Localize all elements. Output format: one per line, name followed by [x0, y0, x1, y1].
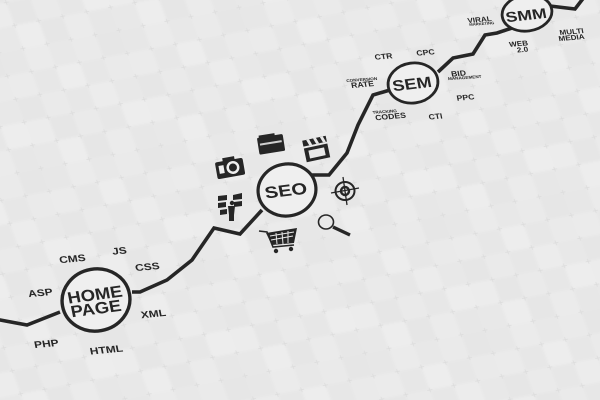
labels around SEM: CTR [374, 52, 393, 62]
icon: magnifying glass [318, 215, 350, 235]
node: SMM: SMM [504, 5, 548, 26]
icon: document folder [257, 132, 285, 155]
labels around SEM: CTI [428, 112, 443, 121]
labels around SEM: RATE [350, 80, 375, 90]
icon: person with photo panels [218, 193, 242, 221]
labels around home page: ASP [27, 287, 54, 300]
labels around SEM: CONVERSION [346, 76, 378, 83]
labels around SMM: MULTI [559, 27, 584, 37]
icon: camera [214, 155, 245, 179]
node: SEO [254, 159, 320, 221]
labels around home page [27, 245, 167, 357]
labels around SMM: 2.0 [516, 45, 529, 54]
labels around SMM: MARKETING [469, 20, 495, 27]
rising trend line [0, 0, 585, 325]
node: home page [57, 264, 135, 336]
labels around home page: HTML [89, 344, 124, 357]
labels around home page: JS [111, 245, 128, 257]
node: home page: PAGE [69, 296, 123, 321]
icon: film clapperboard [302, 136, 330, 162]
labels around SEM: CODES [374, 111, 407, 122]
labels around SEM: TRACKING [372, 108, 398, 115]
labels around SMM: VIRAL [467, 14, 493, 25]
labels around home page: CSS [134, 261, 161, 274]
node: SEM [385, 60, 441, 106]
icon: shopping cart [259, 228, 297, 253]
labels around SEM: CPC [416, 48, 436, 58]
labels around home page: CMS [58, 253, 87, 266]
labels around home page: XML [140, 308, 167, 321]
labels around SEM: MANAGEMENT [448, 74, 482, 81]
labels around SEM: BID [450, 69, 467, 78]
labels around home page: PHP [33, 338, 60, 351]
node: home page: HOME [66, 282, 124, 307]
labels around SEM: PPC [456, 93, 475, 103]
labels around SMM [467, 14, 586, 54]
labels around SMM: WEB [508, 39, 529, 49]
labels around SMM: MEDIA [558, 32, 586, 43]
labels around SEM [346, 48, 482, 122]
node: SEM: SEM [391, 73, 433, 95]
node: SMM [500, 0, 554, 34]
icon: target crosshair [331, 177, 359, 205]
node: SEO: SEO [263, 179, 309, 202]
